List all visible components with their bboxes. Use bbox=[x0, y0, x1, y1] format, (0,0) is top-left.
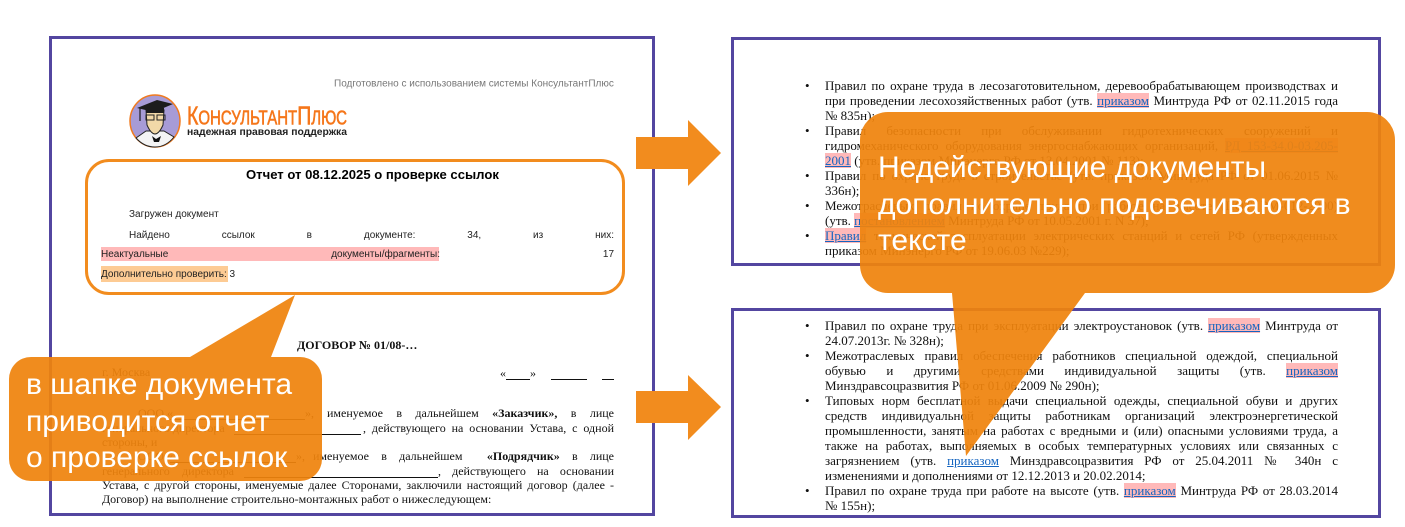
text: contract body bbox=[102, 365, 614, 506]
text: upper excerpt list: Правил безопасности при обслуживании гидротехнических сооружений и bbox=[825, 123, 1338, 138]
highlight: check additionally bbox=[101, 266, 228, 282]
icon: ConsultantPlus logo: КОНСУЛЬТАНТПЛЮС bbox=[187, 100, 347, 130]
text: lower excerpt list bbox=[805, 318, 1338, 513]
text: lower excerpt list: средств индивидуальной защиты работникам организаций электроэнергетической bbox=[825, 408, 1338, 423]
arrow: upper right arrow bbox=[636, 120, 721, 186]
text: lower excerpt list: также на работах, выполняемых в особых температурных условиях или связанных с bbox=[825, 438, 1338, 453]
text: lower excerpt list: обувью и другими средствами индивидуальной защиты (утв. приказом bbox=[825, 363, 1338, 378]
callout text bbox=[878, 151, 1351, 257]
text: contract body: , действующего на основании Устава, с одной bbox=[363, 421, 614, 435]
text: lower excerpt list: Минздравсоцразвития РФ от 01.06.2009 № 290н); bbox=[825, 378, 1100, 393]
text: upper excerpt list: • bbox=[805, 198, 810, 213]
text: upper excerpt list: • bbox=[805, 123, 810, 138]
text: upper excerpt list: № 835н); bbox=[825, 108, 875, 123]
text: links found: Найдено ссылок в документе: 34, из них: bbox=[129, 230, 614, 241]
text: upper excerpt list: Межотраслевых правил по охране труда при работе на высоте (ПОТ РМ-012-2000) bbox=[825, 198, 1338, 213]
text: lower excerpt list: Типовых норм бесплатной выдачи специальной одежды, специальной обуви и других bbox=[825, 393, 1338, 408]
panel: lower text excerpt bbox=[731, 308, 1381, 518]
text: contract body: именуемое в дальнейшем «Заказчик», в лице bbox=[327, 406, 614, 420]
text: lower excerpt list: • bbox=[805, 348, 810, 363]
text: upper excerpt list: (утв. постановлением Минтруда РФ от 10.05.2001 г. N 37); bbox=[825, 213, 1149, 228]
callout: outdated documents highlighted bbox=[860, 112, 1395, 456]
text: contract body: Устава, с другой стороны, именуемые далее Сторонами, заключили настоящий договор (далее - bbox=[102, 478, 614, 492]
heading: contract title: ДОГОВОР № 01/08-… bbox=[297, 338, 417, 352]
text: contract body: ООО « bbox=[138, 406, 173, 420]
callout text: дополнительно подсвечиваются в bbox=[878, 188, 1351, 220]
callout shape bbox=[860, 112, 1395, 456]
text: contract body: генерального директора bbox=[102, 421, 225, 435]
text: upper excerpt list: приказом Минэнерго РФ от 19.06.03 №229); bbox=[825, 243, 1070, 258]
callout text: в шапке документа bbox=[26, 368, 292, 401]
panel: link check report frame bbox=[85, 159, 625, 295]
arrow: lower right arrow bbox=[636, 375, 721, 440]
text: lower excerpt list: Правил по охране труда при эксплуатации электроустановок (утв. приказом Минтруда от bbox=[825, 318, 1338, 333]
text: contract body: именуемое в дальнейшем «Подрядчик» в лице bbox=[313, 449, 614, 463]
text: check additionally count: Дополнительно проверить: 3 bbox=[101, 269, 235, 280]
panel: upper text excerpt bbox=[731, 37, 1381, 266]
text: upper excerpt list: Правил технической эксплуатации электрических станций и сетей РФ (утвержденных bbox=[825, 228, 1338, 243]
text: contract body: стороны, и bbox=[102, 435, 157, 449]
text: lower excerpt list: Межотраслевых правил обеспечения работников специальной одеждой, специальной bbox=[825, 348, 1338, 363]
text: lower excerpt list: изменениями и дополнениями от 12.12.2013 и 20.02.2014; bbox=[825, 468, 1145, 483]
text: prepared with system note: Подготовлено с использованием системы КонсультантПлюс bbox=[334, 78, 614, 90]
text: upper excerpt list bbox=[805, 78, 1338, 258]
text: contract body: » bbox=[530, 366, 536, 380]
heading: report title: Отчет от 08.12.2025 о проверке ссылок bbox=[246, 167, 499, 182]
text: lower excerpt list: 24.07.2013г. № 328н); bbox=[825, 333, 944, 348]
text: lower excerpt list: • bbox=[805, 393, 810, 408]
callout text bbox=[26, 368, 292, 474]
text: contract body: , действующего на основании bbox=[438, 464, 614, 478]
text: upper excerpt list: • bbox=[805, 78, 810, 93]
text: lower excerpt list: промышленности, занятым на работах с вредными и (или) опасными условиями труда, а bbox=[825, 423, 1338, 438]
callout: report in document header bbox=[9, 295, 322, 481]
text: contract body: », bbox=[305, 406, 314, 420]
callout text: о проверке ссылок bbox=[26, 441, 287, 474]
text: contract body: г. Москва bbox=[102, 365, 150, 379]
text: upper excerpt list: гидромеханического оборудования энергоснабжающих организаций, РД 153-34.0-03.205- bbox=[825, 138, 1338, 153]
panel: document header and contract bbox=[49, 36, 655, 516]
text: contract body: генерального директора bbox=[102, 464, 234, 478]
text: contract body: », bbox=[296, 449, 305, 463]
text: upper excerpt list: Правил по охране труда в лесозаготовительном, деревообрабатывающем производствах и bbox=[825, 78, 1338, 93]
text: document loaded: Загружен документ bbox=[129, 209, 219, 220]
text: upper excerpt list: 336н); bbox=[825, 183, 859, 198]
highlight: outdated documents bbox=[101, 247, 439, 261]
text: contract body: « bbox=[500, 366, 506, 380]
text: upper excerpt list: • bbox=[805, 228, 810, 243]
text: upper excerpt list: при проведении лесохозяйственных работ (утв. приказом Минтруда РФ от 02.11.2015 года bbox=[825, 93, 1338, 108]
callout shape bbox=[9, 295, 322, 481]
text: upper excerpt list: 2001 (утв. приказом Минэнерго РФ от 13.04.2001 № 113); bbox=[825, 153, 1144, 168]
text: lower excerpt list: № 155н); bbox=[825, 498, 875, 513]
text: outdated documents count: Неактуальные документы/фрагменты: 17 bbox=[101, 249, 614, 260]
text: contract body: ООО « bbox=[138, 449, 173, 463]
text: lower excerpt list: • bbox=[805, 483, 810, 498]
icon: ConsultantPlus logo bbox=[129, 94, 348, 148]
text: upper excerpt list: Правил по охране труда в строительстве (утв. приказом Минтруда РФ от 01.06.2015 № bbox=[825, 168, 1338, 183]
text: lower excerpt list: загрязнением (утв. приказом Минздравсоцразвития РФ от 25.04.2011 № 340н с bbox=[825, 453, 1338, 468]
callout text: приводится отчет bbox=[26, 404, 269, 438]
callout text: тексте bbox=[878, 224, 967, 257]
callout text: Недействующие документы bbox=[878, 151, 1266, 184]
text: contract body: Договор) на выполнение строительно-монтажных работ о нижеследующем: bbox=[102, 492, 491, 506]
text: lower excerpt list: Правил по охране труда при работе на высоте (утв. приказом Минтруда РФ от 28.03.2014 bbox=[825, 483, 1338, 498]
icon: ConsultantPlus logo: надежная правовая поддержка bbox=[187, 126, 347, 138]
text: lower excerpt list: • bbox=[805, 318, 810, 333]
text: upper excerpt list: • bbox=[805, 168, 810, 183]
